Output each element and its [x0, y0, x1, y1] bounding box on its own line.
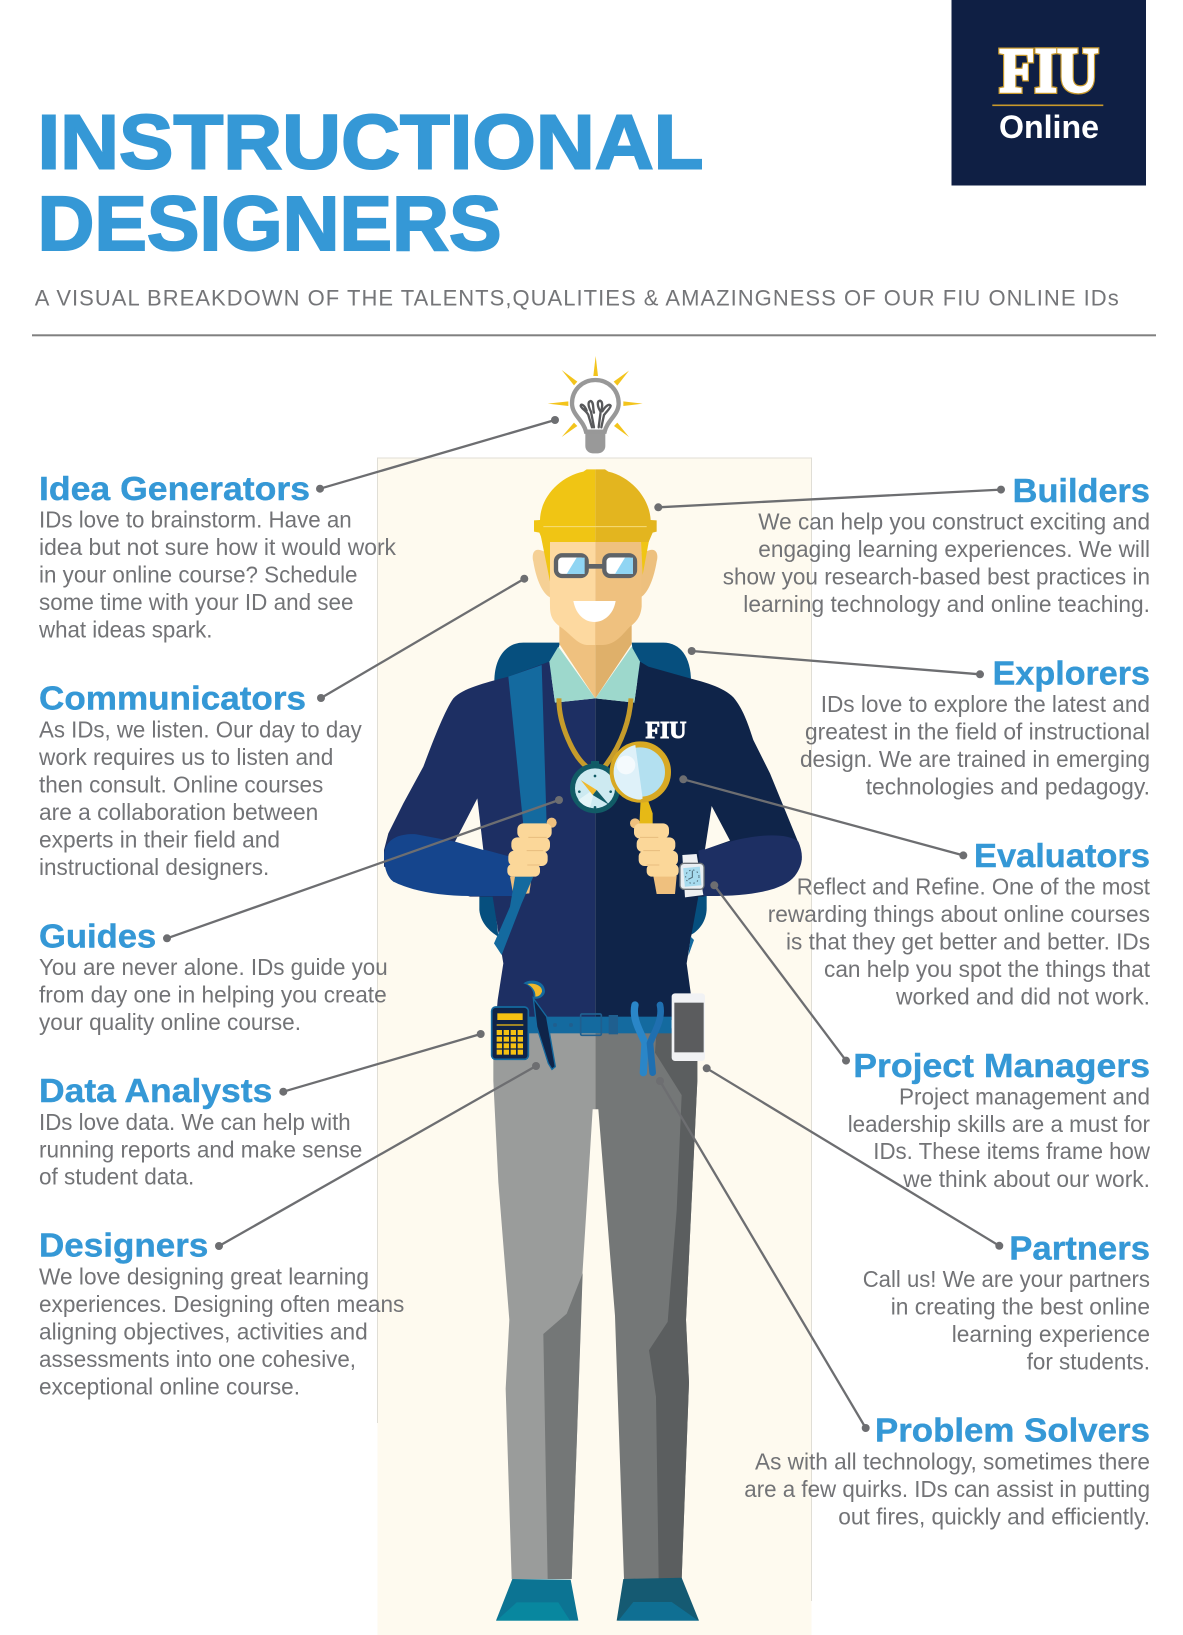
heading: Partners — [1009, 1229, 1150, 1266]
leader line: Problem Solvers — [656, 1077, 870, 1432]
subtitle: A VISUAL BREAKDOWN OF THE TALENTS,QUALITIES & AMAZINGNESS OF OUR FIU ONLINE IDs — [35, 286, 1119, 311]
title: DESIGNERS — [38, 181, 502, 267]
title — [38, 100, 704, 267]
panel: Partners — [863, 1229, 1150, 1375]
body text: Call us! We are your partners — [863, 1266, 1150, 1292]
body text: We love designing great learning — [39, 1264, 369, 1290]
body text: is that they get better and better. IDs — [786, 929, 1150, 955]
body text: Reflect and Refine. One of the most — [797, 874, 1151, 900]
body text: Project management and — [899, 1084, 1150, 1110]
heading: Designers — [39, 1227, 208, 1264]
logo: FIU Online — [952, 0, 1146, 186]
body text: As IDs, we listen. Our day to day — [39, 717, 362, 743]
body text: your quality online course. — [39, 1009, 301, 1035]
icon: paintbrush — [523, 981, 555, 1069]
icon: smart watch — [680, 854, 704, 897]
body text: are a few quirks. IDs can assist in putting — [744, 1476, 1150, 1502]
icon: compass — [570, 761, 620, 813]
panel: Guides — [39, 917, 388, 1035]
body text: work requires us to listen and — [38, 744, 333, 770]
body text: assessments into one cohesive, — [39, 1346, 356, 1372]
background panel — [378, 458, 812, 1635]
body text: leadership skills are a must for — [848, 1111, 1150, 1137]
divider rule — [32, 334, 1156, 336]
heading: Communicators — [39, 679, 306, 716]
leader line: Idea Generators — [316, 416, 559, 493]
body text: experiences. Designing often means — [39, 1291, 404, 1317]
body text: design. We are trained in emerging — [800, 746, 1150, 772]
body text — [863, 1266, 1150, 1375]
body text: aligning objectives, activities and — [39, 1319, 368, 1345]
body text: technologies and pedagogy. — [866, 774, 1150, 800]
leader line: Partners — [703, 1064, 1003, 1250]
body text: are a collaboration between — [39, 799, 318, 825]
icon: magnifying glass handle — [639, 798, 653, 826]
heading: Evaluators — [974, 837, 1150, 874]
icon: smartphone — [672, 993, 705, 1061]
body text: greatest in the field of instructional — [805, 719, 1150, 745]
belt — [527, 1014, 672, 1035]
heading: Guides — [39, 917, 156, 954]
body text: what ideas spark. — [38, 617, 213, 643]
heading: Data Analysts — [39, 1072, 272, 1109]
panel: Data Analysts — [39, 1072, 362, 1190]
body text: worked and did not work. — [895, 984, 1150, 1010]
body text: rewarding things about online courses — [768, 901, 1150, 927]
leader line: Builders — [654, 486, 1005, 511]
panel: Communicators — [38, 679, 362, 880]
body text: instructional designers. — [39, 854, 269, 880]
body text: exceptional online course. — [39, 1374, 300, 1400]
title: INSTRUCTIONAL — [38, 100, 704, 186]
body text: then consult. Online courses — [39, 772, 323, 798]
body text — [768, 874, 1151, 1010]
icon: calculator — [492, 1007, 528, 1059]
body text — [38, 717, 362, 880]
body text: engaging learning experiences. We will — [758, 536, 1150, 562]
panel: Evaluators — [768, 837, 1151, 1010]
body text: We can help you construct exciting and — [758, 509, 1150, 535]
leader line: Evaluators — [679, 775, 967, 859]
body text: IDs. These items frame how — [873, 1138, 1150, 1164]
leader line: Project Managers — [710, 881, 850, 1065]
panel: Builders — [723, 472, 1150, 617]
icon: pliers — [634, 1005, 661, 1073]
panel: Problem Solvers — [744, 1412, 1150, 1529]
leader line: Designers — [215, 1062, 540, 1250]
panel: Explorers — [800, 654, 1150, 800]
body text: some time with your ID and see — [39, 589, 354, 615]
collar, neck — [549, 623, 640, 703]
body text — [848, 1084, 1150, 1192]
icon: light bulb — [548, 356, 643, 453]
body text: learning experience — [952, 1321, 1150, 1347]
shirt logo: FIU — [646, 718, 686, 744]
body text: You are never alone. IDs guide you — [39, 954, 388, 980]
icon: magnifying glass — [613, 744, 668, 800]
body text: experts in their field and — [39, 827, 280, 853]
body text: we think about our work. — [902, 1166, 1150, 1192]
logo: FIU Online: FIU — [1000, 36, 1098, 106]
body text: for students. — [1027, 1349, 1150, 1375]
figure: instructional designer — [384, 469, 802, 1621]
body text: running reports and make sense — [39, 1136, 362, 1162]
panel: Idea Generators — [38, 470, 396, 643]
heading: Explorers — [993, 654, 1150, 691]
body text: in creating the best online — [891, 1294, 1150, 1320]
body text: can help you spot the things that — [824, 956, 1151, 982]
body text: IDs love to explore the latest and — [821, 691, 1150, 717]
heading: Problem Solvers — [875, 1412, 1150, 1449]
body text: from day one in helping you create — [39, 982, 387, 1008]
body text — [39, 1109, 362, 1190]
leader line: Data Analysts — [279, 1030, 485, 1096]
body text: IDs love data. We can help with — [39, 1109, 351, 1135]
body text: out fires, quickly and efficiently. — [838, 1503, 1150, 1529]
pants and shoes — [493, 1028, 699, 1621]
leader line: Explorers — [688, 647, 984, 678]
body text — [723, 509, 1150, 617]
belt and tools — [492, 698, 705, 1073]
panel: Designers — [39, 1227, 404, 1400]
body text: of student data. — [39, 1164, 194, 1190]
body text: As with all technology, sometimes there — [755, 1448, 1150, 1474]
leader line: Communicators — [317, 575, 528, 702]
body text: learning technology and online teaching. — [743, 591, 1150, 617]
body text — [39, 954, 388, 1035]
heading: Builders — [1013, 472, 1150, 509]
leader line: Guides — [163, 796, 563, 942]
body text: show you research-based best practices in — [723, 564, 1150, 590]
panel: Project Managers — [848, 1047, 1150, 1192]
body text — [800, 691, 1150, 800]
body text: IDs love to brainstorm. Have an — [39, 507, 352, 533]
lanyard — [559, 698, 631, 768]
heading: Idea Generators — [39, 470, 310, 507]
logo: FIU Online: FIU — [1000, 36, 1098, 106]
heading: Project Managers — [853, 1047, 1150, 1084]
backpack shoulders — [494, 643, 691, 682]
logo: FIU Online: Online — [999, 109, 1099, 145]
body text: in your online course? Schedule — [39, 562, 358, 588]
body text — [39, 1264, 404, 1400]
torso, arms and hands — [384, 662, 802, 1020]
body text — [38, 507, 396, 643]
body text — [744, 1448, 1150, 1529]
body text: idea but not sure how it would work — [39, 534, 396, 560]
head: ears, face, glasses, smile, hard hat — [533, 469, 657, 645]
